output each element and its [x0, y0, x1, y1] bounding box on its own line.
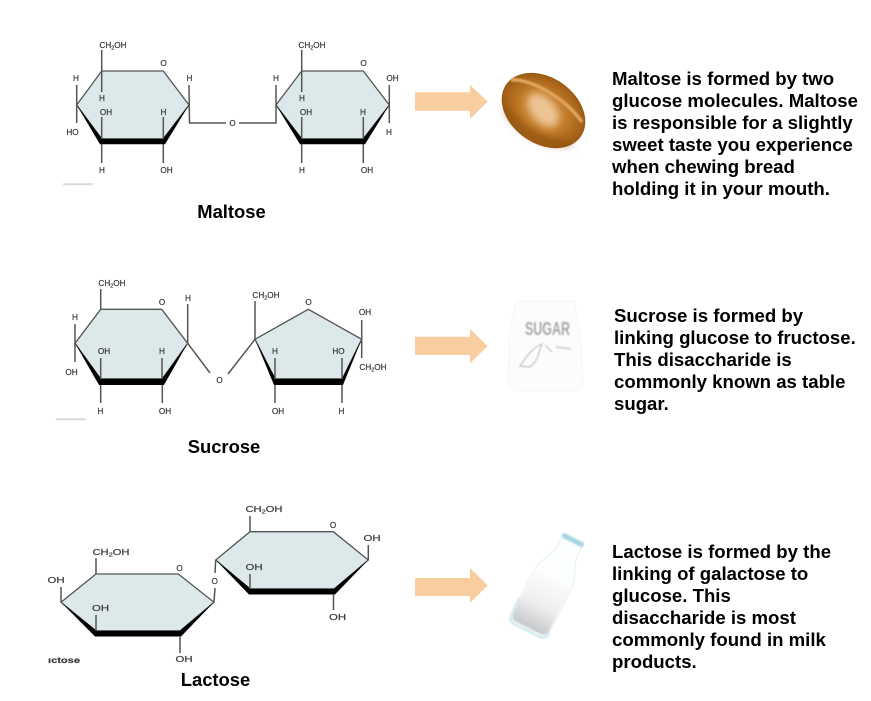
lactose description: disaccharide is most — [612, 607, 796, 628]
maltose right ring: OH — [313, 41, 326, 50]
maltose description: when chewing bread — [611, 156, 795, 177]
maltose description: is responsible for a slightly — [612, 112, 853, 133]
maltose left ring: H — [73, 74, 79, 83]
maltose left ring: O — [160, 59, 167, 68]
glycosidic bond: O — [212, 577, 218, 586]
lactose left ring: 2 — [109, 552, 113, 558]
glucose ring: O — [159, 298, 165, 307]
maltose description: holding it in your mouth. — [612, 178, 830, 199]
lactose description: linking of galactose to — [612, 563, 808, 584]
maltose right ring: H — [360, 108, 366, 117]
maltose left ring: H — [187, 74, 193, 83]
maltose left ring: OH — [114, 41, 127, 50]
lactose description: commonly found in milk — [612, 629, 826, 650]
maltose right ring: H — [273, 74, 279, 83]
fructose ring: OH — [267, 291, 280, 300]
maltose description: Maltose is formed by two — [612, 68, 834, 89]
arrow: sucrose — [415, 329, 488, 363]
maltose cropped caption — [63, 184, 93, 185]
fructose ring: 2 — [264, 296, 267, 302]
maltose right ring — [273, 41, 399, 175]
lactose description: products. — [612, 651, 697, 672]
lactose right ring: CH — [246, 505, 257, 514]
maltose left ring: 2 — [111, 46, 114, 52]
lactose right ring: OH — [364, 534, 381, 543]
lactose left ring: CH — [92, 548, 104, 557]
maltose right ring: H — [386, 128, 392, 137]
fructose ring: CH — [252, 291, 264, 300]
maltose left ring: OH — [100, 108, 112, 117]
maltose left ring: H — [99, 94, 105, 103]
maltose structure — [66, 41, 399, 175]
fructose ring: OH — [374, 363, 387, 372]
lactose left ring — [48, 548, 214, 664]
glycosidic bond — [212, 560, 218, 602]
lactose structure — [48, 505, 381, 665]
maltose left ring: CH — [99, 41, 111, 50]
lactose label: Lactose — [181, 669, 250, 690]
sucrose description: Sucrose is formed by — [614, 305, 804, 326]
glycosidic bond — [188, 339, 255, 385]
lactose right ring: OH — [266, 505, 283, 514]
glycosidic bond: O — [216, 376, 223, 385]
sucrose description: This disaccharide is — [614, 349, 792, 370]
fructose ring: OH — [359, 308, 371, 317]
lactose right ring: 2 — [262, 510, 266, 516]
arrow: maltose — [415, 85, 488, 119]
lactose right ring — [216, 505, 381, 622]
sucrose cropped caption — [56, 418, 86, 420]
arrow: lactose — [415, 568, 488, 603]
maltose description: sweet taste you experience — [612, 134, 853, 155]
maltose left ring: OH — [160, 166, 173, 175]
lactose description: Lactose is formed by the — [612, 541, 831, 562]
lactose description: glucose. This — [612, 585, 731, 606]
maltose left ring — [66, 41, 193, 175]
sucrose description: linking glucose to fructose. — [614, 327, 856, 348]
maltose right ring: 2 — [310, 46, 313, 52]
glucose ring: OH — [159, 407, 171, 416]
glucose ring: H — [72, 313, 78, 322]
fructose ring: H — [272, 347, 278, 356]
fructose ring: OH — [272, 407, 284, 416]
maltose left ring: HO — [66, 128, 79, 137]
sucrose description — [614, 305, 856, 414]
maltose right ring: H — [299, 166, 305, 175]
maltose left ring: H — [99, 166, 105, 175]
lactose left ring: OH — [92, 604, 109, 613]
maltose right ring: CH — [298, 41, 310, 50]
fructose ring: H — [339, 407, 345, 416]
maltose right ring: O — [360, 59, 367, 68]
lactose description — [612, 541, 831, 672]
lactose left ring: OH — [176, 655, 193, 664]
fructose ring: HO — [332, 347, 345, 356]
glucose ring: H — [159, 347, 165, 356]
glucose ring: H — [185, 294, 191, 303]
icon: milk bottle — [508, 528, 593, 640]
maltose right ring: OH — [361, 166, 373, 175]
lactose left ring: OH — [113, 548, 130, 557]
lactose left ring: O — [176, 564, 183, 573]
glucose ring: 2 — [110, 284, 113, 290]
glucose ring: OH — [98, 347, 110, 356]
icon: bread roll — [487, 57, 600, 164]
glucose ring: CH — [98, 279, 110, 288]
glucose ring — [65, 279, 191, 416]
fructose ring: O — [305, 298, 312, 307]
lactose right ring: OH — [329, 613, 346, 622]
lactose right ring: OH — [246, 563, 263, 572]
glycosidic bond: O — [229, 119, 236, 128]
sucrose description: sugar. — [614, 393, 669, 414]
maltose left ring: H — [161, 108, 167, 117]
maltose description — [611, 68, 858, 199]
icon: sugar bag: SUGAR — [525, 319, 570, 339]
sucrose structure — [65, 279, 387, 416]
sucrose label: Sucrose — [188, 436, 260, 457]
fructose ring: 2 — [371, 368, 374, 374]
glycosidic bond — [189, 85, 276, 128]
maltose right ring: H — [299, 94, 305, 103]
maltose right ring: OH — [386, 74, 399, 83]
maltose label: Maltose — [197, 201, 266, 222]
sucrose description: commonly known as table — [614, 371, 845, 392]
lactose left ring: OH — [48, 576, 65, 585]
glucose ring: H — [98, 407, 104, 416]
fructose ring: CH — [359, 363, 371, 372]
lactose cropped caption: ıctose — [48, 656, 81, 665]
lactose right ring: O — [330, 521, 336, 530]
maltose description: glucose molecules. Maltose — [612, 90, 858, 111]
fructose ring — [252, 291, 387, 416]
icon: sugar bag — [508, 301, 583, 391]
maltose right ring: OH — [300, 108, 312, 117]
glucose ring: OH — [113, 279, 126, 288]
glucose ring: OH — [65, 368, 78, 377]
